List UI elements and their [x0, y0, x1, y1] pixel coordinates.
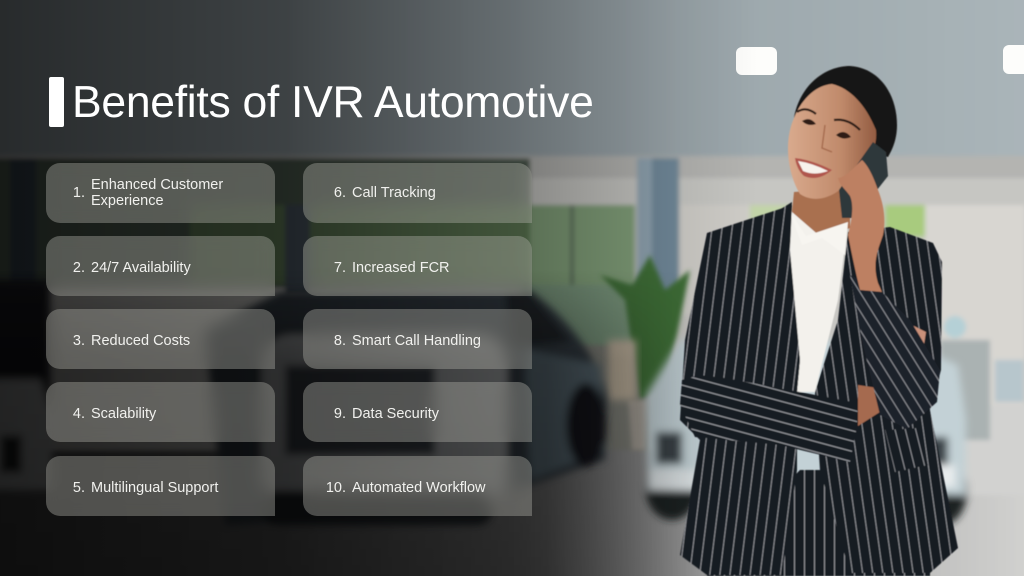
trousers — [707, 470, 930, 576]
hand under elbow — [858, 385, 880, 426]
card 4: Scalability — [46, 382, 275, 442]
card 4: Scalability: 4. — [73, 406, 85, 422]
card 7: Increased FCR: 7. — [334, 260, 346, 276]
nose — [822, 125, 832, 152]
card 3: Reduced Costs: 3. — [73, 332, 85, 348]
card 10: Automated Workflow: Automated Workflow — [352, 480, 486, 496]
card 2: 24/7 Availability — [46, 236, 275, 296]
jacket left panel — [680, 205, 800, 575]
card 6: Call Tracking: Call Tracking — [352, 185, 436, 201]
card 3: Reduced Costs — [46, 309, 275, 369]
hair back — [794, 66, 897, 157]
card 8: Smart Call Handling: Smart Call Handling — [352, 332, 481, 348]
card 1: Enhanced Customer Experience: 1. — [73, 185, 85, 201]
jacket right panel — [815, 227, 958, 573]
face — [788, 84, 876, 199]
card 1: Enhanced Customer Experience: Enhanced Customer — [91, 176, 223, 192]
card 7: Increased FCR: Increased FCR — [352, 260, 450, 276]
shirt — [788, 210, 848, 392]
card 8: Smart Call Handling — [303, 309, 532, 369]
shirt collar — [789, 210, 848, 255]
card 1: Enhanced Customer Experience: Experience — [91, 193, 164, 209]
card 5: Multilingual Support: Multilingual Support — [91, 480, 218, 496]
card 5: Multilingual Support — [46, 456, 275, 516]
lapel left — [750, 202, 800, 392]
right arm — [850, 275, 940, 429]
card 9: Data Security: Data Security — [352, 406, 439, 422]
card 6: Call Tracking — [303, 163, 532, 223]
car: dark blue SUV behind cards — [205, 290, 607, 525]
blurred person in background — [608, 340, 636, 400]
card 1: Enhanced Customer Experience — [46, 163, 275, 223]
title accent bar — [49, 77, 64, 127]
folded forearm — [680, 375, 858, 462]
card 3: Reduced Costs: Reduced Costs — [91, 332, 190, 348]
car: left edge — [0, 280, 52, 490]
card 2: 24/7 Availability: 24/7 Availability — [91, 260, 191, 276]
card 10: Automated Workflow: 10. — [326, 480, 346, 496]
card 9: Data Security — [303, 382, 532, 442]
ceiling lights — [736, 45, 1024, 75]
title: Benefits of IVR Automotive — [72, 78, 594, 126]
card 5: Multilingual Support: 5. — [73, 480, 85, 496]
card 4: Scalability: Scalability — [91, 406, 156, 422]
card 8: Smart Call Handling: 8. — [334, 332, 346, 348]
eyes — [802, 119, 851, 139]
hand and wrist — [838, 160, 884, 292]
pocket flap — [885, 428, 928, 472]
card 7: Increased FCR — [303, 236, 532, 296]
smile — [795, 158, 832, 178]
eyebrows — [797, 109, 860, 130]
phone — [839, 142, 888, 218]
neck — [792, 188, 850, 238]
card 10: Automated Workflow — [303, 456, 532, 516]
card 9: Data Security: 9. — [334, 406, 346, 422]
car: white SUV behind the woman — [646, 340, 967, 524]
plant — [600, 255, 690, 450]
card 2: 24/7 Availability: 2. — [73, 260, 85, 276]
card 6: Call Tracking: 6. — [334, 185, 346, 201]
